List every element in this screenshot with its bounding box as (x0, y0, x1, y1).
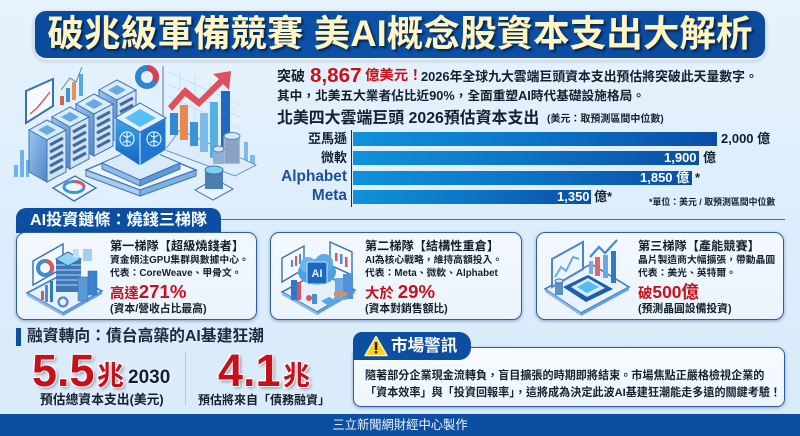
tier two heading: 第二梯隊【結構性重倉】 (365, 239, 499, 253)
stat: total capex 5.5 trillion (32, 345, 170, 407)
summary line: 其中，北美五大業者佔比近90%，全面重塑AI時代基礎設施格局。 (277, 89, 645, 103)
bar label: Microsoft: 微軟 (321, 150, 347, 165)
disk stacks (195, 132, 240, 200)
headline figure: 8,867 (310, 64, 362, 87)
AI cube (115, 103, 166, 166)
tier one note: (資本/營收占比最高) (110, 303, 207, 315)
red growth arrow (168, 71, 231, 111)
unit: 兆 (283, 361, 310, 391)
financing heading (16, 327, 264, 346)
icon: server and charts (26, 242, 104, 316)
background grid (168, 72, 240, 150)
panel: market warning (351, 332, 787, 410)
title banner: 破兆級軍備競賽 美AI概念股資本支出大解析 (47, 13, 753, 54)
asterisk: Alphabet: * (695, 170, 700, 185)
heading text: 融資轉向：債台高築的AI基建狂潮 (27, 328, 264, 345)
panel: line chart (26, 79, 53, 123)
bar label: Amazon: 亞馬遜 (308, 131, 347, 146)
bar chart (165, 91, 256, 176)
hero illustration: AI data center (14, 65, 257, 202)
unit: Microsoft: 億 (703, 150, 716, 165)
floor plate (16, 120, 255, 205)
chart: North America capex (277, 109, 664, 127)
donut tile (53, 176, 96, 201)
warning body: 隨著部分企業現金流轉負，盲目擴張的時期即將結束。市場焦點正嚴格檢視企業的 (365, 370, 764, 382)
section tab: AI investment chain (16, 208, 221, 233)
pie icon (138, 68, 156, 86)
warning body (365, 369, 781, 399)
small bars right (232, 142, 255, 168)
warning box (353, 347, 785, 407)
chart footnote: *單位：美元 / 取預測區間中位數 (649, 197, 775, 207)
tier three description: 晶片製造商大幅擴張，帶動晶圓 (638, 255, 775, 266)
warning tab (353, 332, 471, 360)
panel: tier three (536, 232, 784, 320)
tier one examples: 代表：CoreWeave、甲骨文。 (110, 268, 242, 279)
bar label: Alphabet: Alphabet (281, 168, 347, 185)
headline sentence: 2026年全球九大雲端巨頭資本支出預估將突破此天量數字。 (421, 69, 758, 84)
icon: AI cloud: AI (312, 268, 322, 280)
warning body: 「資本效率」與「投資回報率」，這將成為決定此波AI基建狂潮能走多遠的關鍵考驗！ (365, 387, 781, 399)
unit: Meta: 億* (594, 189, 612, 204)
panel: tier one (16, 232, 257, 320)
panel: tier two (270, 232, 522, 320)
tier two note: (資本對銷售額比) (365, 303, 448, 315)
tier three examples: 代表：美光、英特爾。 (638, 268, 736, 279)
small bars left (14, 150, 29, 177)
section tab: AI investment chain: AI投資鏈條：燒錢三梯隊 (30, 211, 207, 229)
chart axis (351, 130, 352, 207)
value: Meta: 1,350 (557, 189, 590, 204)
bar label: Meta: Meta (312, 187, 347, 204)
footer bar: 三立新聞網財經中心製作 (332, 418, 468, 432)
chart heading: 北美四大雲端巨頭 2026預估資本支出 (277, 110, 539, 127)
icon: warning triangle (364, 336, 388, 356)
headline stat text (277, 64, 758, 87)
footer bar (0, 414, 800, 436)
value: Microsoft: 1,900 (664, 150, 697, 165)
lead word: 突破 (277, 68, 305, 84)
year: 2030 (128, 367, 170, 388)
warning heading: 市場警訊 (391, 336, 457, 355)
rack group (29, 80, 136, 182)
bar: Meta (353, 190, 591, 204)
caption: 預估總資本支出(美元) (40, 392, 164, 407)
value: Alphabet: 1,850 億 (640, 170, 689, 185)
tier three figure: 破500億 (638, 282, 699, 302)
bar: Amazon (353, 132, 717, 146)
bar: Microsoft (353, 151, 699, 165)
tier two figure: 大於 29% (365, 281, 435, 302)
chart unit note: (美元：取預測區間中位數) (547, 114, 664, 125)
tier one heading: 第一梯隊【超級燒錢者】 (110, 239, 244, 253)
icon: chip and chart (544, 239, 630, 316)
heading marker (16, 328, 21, 346)
icon: AI cloud (280, 240, 356, 315)
number: 5.5 (32, 345, 95, 396)
tier one description: 資金傾注GPU集群與數據中心。 (110, 255, 249, 266)
caption: 預估將來自「債務融資」 (198, 393, 330, 407)
value: Amazon: 2,000 億 (721, 131, 770, 146)
unit: 兆 (97, 361, 124, 391)
tier two description: AI為核心戰略，維持高額投入。 (365, 255, 502, 266)
tier two examples: 代表：Meta、微軟、Alphabet (365, 268, 498, 279)
central platform (86, 146, 196, 196)
number: 4.1 (218, 345, 281, 396)
headline unit: 億美元！ (365, 68, 423, 84)
mini bars and arrow (60, 67, 83, 105)
tier three note: (預測晶圓設備投資) (638, 303, 732, 315)
bar: Alphabet (353, 171, 692, 185)
tier three heading: 第三梯隊【產能競賽】 (638, 239, 760, 253)
stat: debt financing 4.1 trillion (198, 345, 330, 407)
tier one figure: 高達271% (110, 281, 186, 302)
